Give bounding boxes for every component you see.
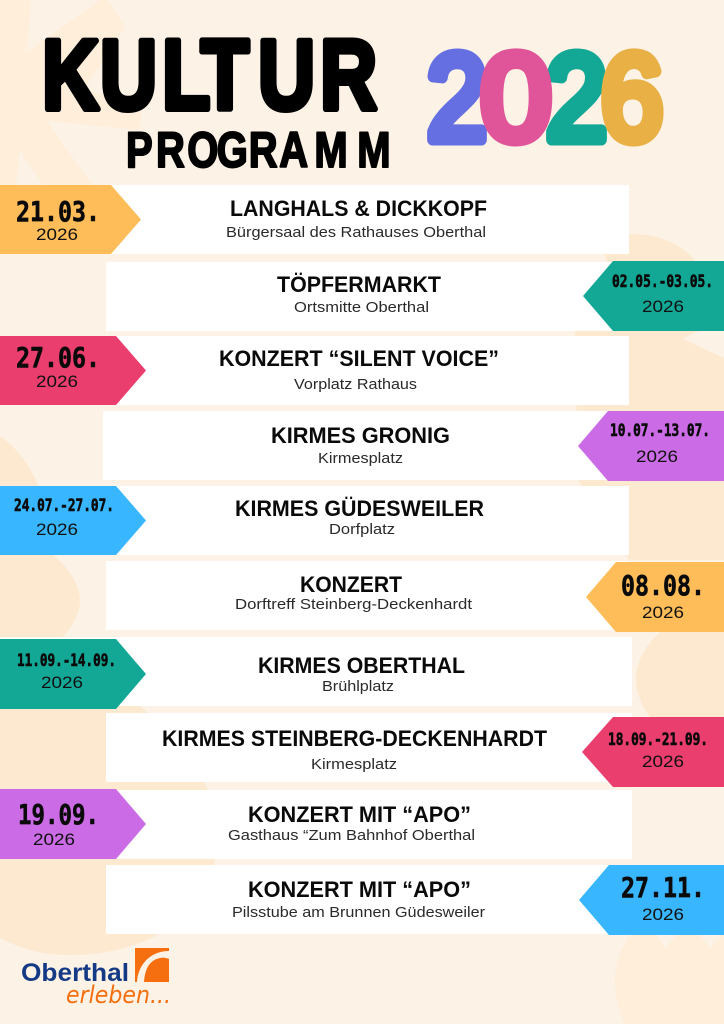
row 3: 27.06. — [16, 341, 100, 374]
row 7 — [0, 639, 465, 709]
title: PROGRAMM: PROGRAMM — [126, 122, 391, 178]
year 2026: 6 — [601, 30, 663, 166]
row 9: 19.09. — [18, 798, 99, 831]
row 8 — [162, 717, 724, 787]
row 5 — [0, 486, 484, 555]
row 3: 2026 — [36, 372, 78, 391]
row 1: Bürgersaal des Rathauses Oberthal — [226, 224, 486, 241]
row 2: TÖPFERMARKT — [277, 272, 442, 297]
row 9 — [0, 789, 475, 859]
row 6: KONZERT — [300, 572, 403, 597]
row 2: Ortsmitte Oberthal — [294, 299, 429, 316]
row 1: LANGHALS & DICKKOPF — [230, 196, 487, 221]
row 1: 2026 — [36, 225, 78, 244]
row 7: Brühlplatz — [322, 678, 394, 695]
row 10 — [232, 865, 724, 935]
row 5: 24.07.-27.07. — [14, 496, 114, 515]
year 2026: 0 — [481, 30, 551, 166]
row 5: 2026 — [36, 520, 78, 539]
row 4: KIRMES GRONIG — [271, 423, 450, 448]
row 6 — [235, 562, 724, 632]
row 7: KIRMES OBERTHAL — [258, 653, 465, 678]
row 10: 2026 — [642, 905, 684, 924]
row 7: 2026 — [41, 673, 83, 692]
row 5: KIRMES GÜDESWEILER — [235, 496, 484, 521]
row 8: KIRMES STEINBERG-DECKENHARDT — [162, 726, 548, 751]
year 2026 — [427, 30, 663, 166]
row 3 — [0, 336, 499, 405]
row 4: Kirmesplatz — [318, 450, 403, 467]
logo: Oberthal erleben: erleben... — [66, 981, 171, 1009]
white event bars — [0, 185, 632, 934]
logo: Oberthal erleben: Oberthal — [21, 959, 129, 987]
row 7: 11.09.-14.09. — [17, 651, 116, 670]
logo: Oberthal erleben — [21, 948, 171, 1009]
row 6: Dorftreff Steinberg-Deckenhardt — [235, 596, 473, 613]
row 2 — [277, 261, 724, 331]
row 3: Vorplatz Rathaus — [294, 376, 417, 393]
row 9: KONZERT MIT “APO” — [248, 802, 471, 827]
row 5: Dorfplatz — [329, 521, 395, 538]
row 6: 2026 — [642, 603, 684, 622]
row 10: KONZERT MIT “APO” — [248, 877, 471, 902]
row 2: 2026 — [642, 297, 684, 316]
row 8: 2026 — [642, 752, 684, 771]
year 2026: 2 — [546, 30, 607, 166]
row 10: 27.11. — [621, 871, 705, 904]
row 10: Pilsstube am Brunnen Güdesweiler — [232, 904, 485, 921]
row 1: 21.03. — [16, 195, 100, 228]
row 1 — [0, 185, 487, 254]
row 3: KONZERT “SILENT VOICE” — [219, 346, 499, 371]
row 4: 2026 — [636, 447, 678, 466]
year 2026: 2 — [427, 30, 487, 166]
row 4 — [271, 411, 724, 481]
row 6: 08.08. — [621, 569, 705, 602]
row 8: Kirmesplatz — [311, 756, 397, 773]
row 9: Gasthaus “Zum Bahnhof Oberthal — [228, 827, 475, 844]
row 9: 2026 — [33, 830, 75, 849]
title: KULTUR: KULTUR — [42, 20, 377, 130]
